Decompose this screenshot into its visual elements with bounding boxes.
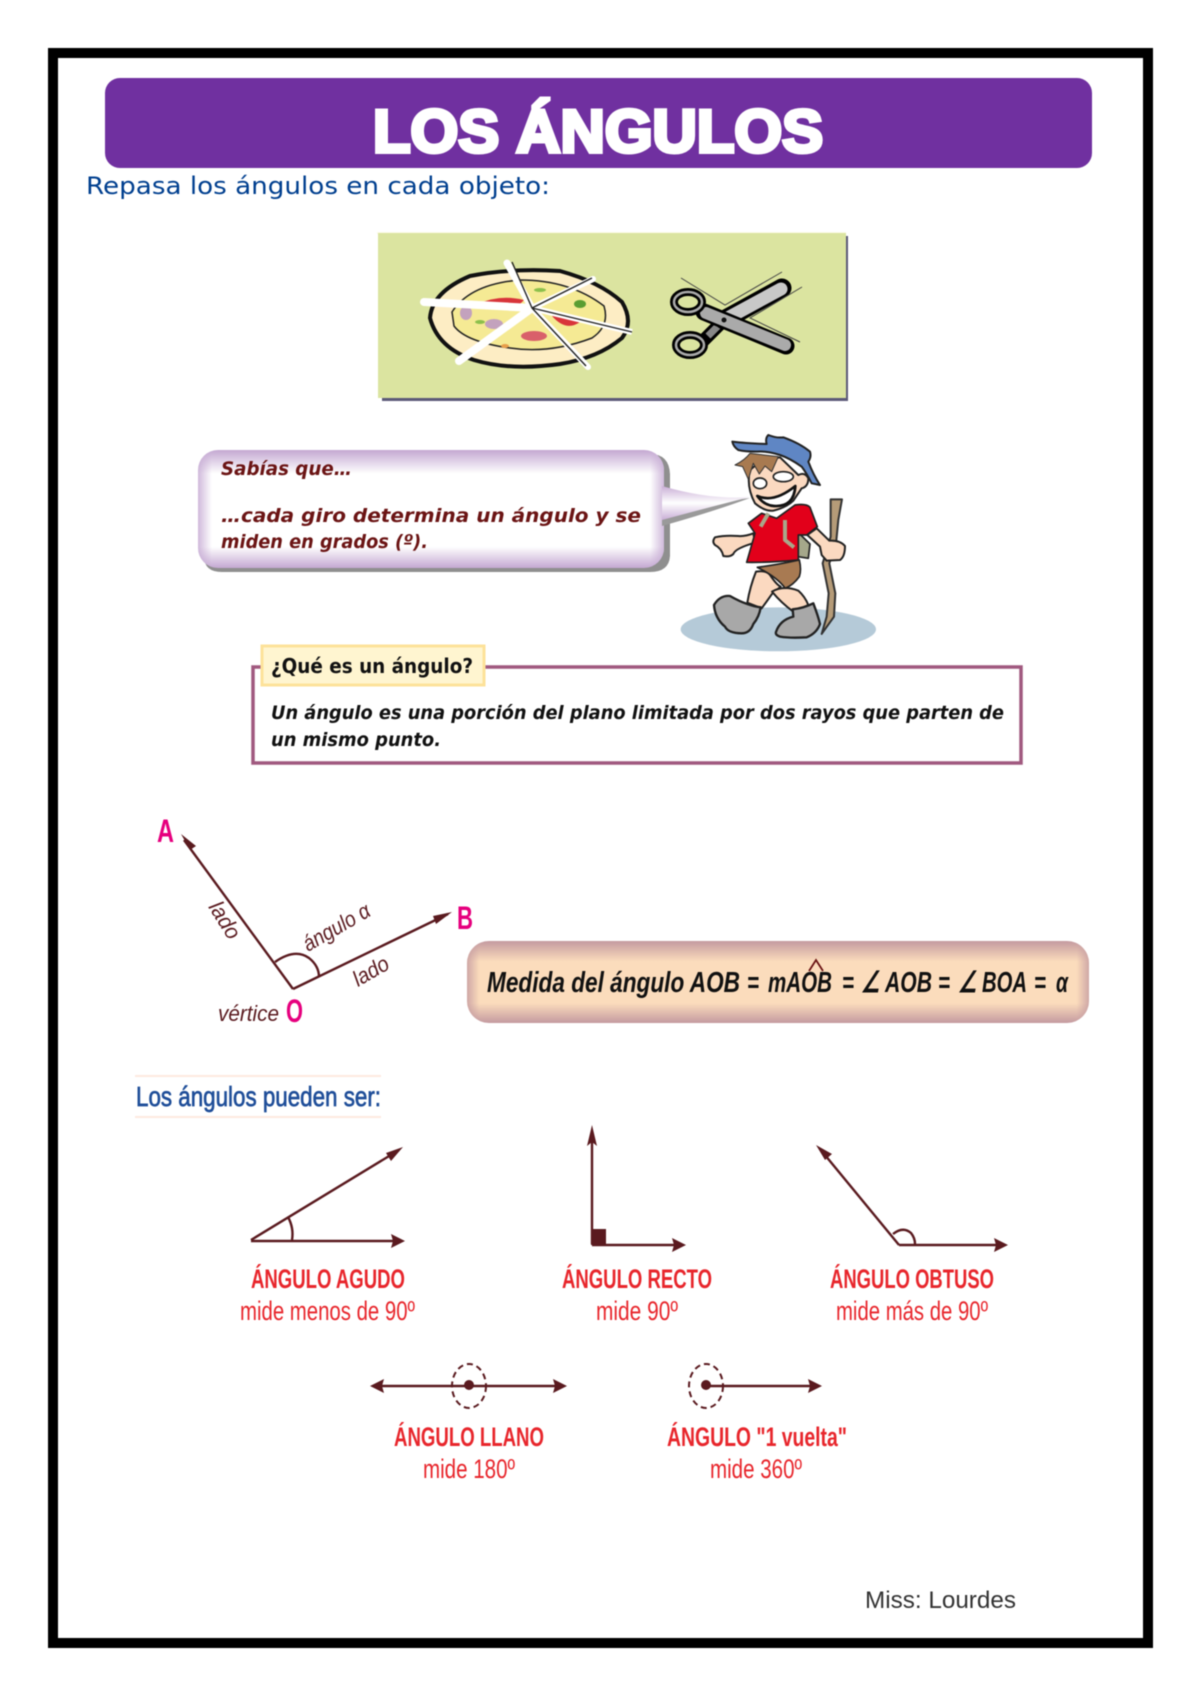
left boot (714, 596, 761, 633)
acute angle: ÁNGULO AGUDO (251, 1263, 405, 1294)
straight angle: ÁNGULO LLANO (394, 1421, 544, 1452)
hat (732, 435, 820, 485)
acute angle (240, 1147, 415, 1326)
diagram: parts of an angle: lado (204, 896, 246, 944)
formula pill: Medida del ángulo AOB (487, 967, 740, 999)
right arm (807, 528, 845, 561)
face (749, 457, 808, 511)
ray OB (293, 914, 448, 989)
formula pill: α (1056, 967, 1069, 999)
callout text: miden en grados (º). (221, 531, 428, 553)
ray OA (184, 840, 293, 989)
callout text: …cada giro determina un ángulo y se (221, 505, 641, 527)
formula pill: = (747, 967, 759, 999)
diagram: parts of an angle: O (286, 993, 303, 1029)
definition text: un mismo punto. (271, 729, 441, 751)
callout: did you know (198, 450, 750, 572)
eyes (753, 478, 767, 489)
formula pill: ∠ (861, 967, 880, 999)
right angle: mide 90º (596, 1296, 678, 1326)
shorts (757, 560, 800, 588)
right angle (562, 1125, 712, 1326)
title banner: LOS ÁNGULOS (373, 98, 823, 165)
full turn angle: mide 360º (710, 1454, 802, 1484)
walking stick (822, 499, 842, 634)
obtuse angle (816, 1145, 1008, 1326)
formula pill: BOA (982, 967, 1027, 999)
formula pill: AOB (884, 967, 932, 999)
formula pill: = (1034, 967, 1046, 999)
obtuse angle: mide más de 90º (836, 1296, 988, 1326)
diagram: parts of an angle: lado (348, 951, 393, 991)
instruction text: Repasa los ángulos en cada objeto: (86, 172, 550, 200)
formula pill: = (938, 967, 950, 999)
formula pill: ∠ (958, 967, 977, 999)
diagram: parts of an angle: ángulo α (298, 897, 376, 956)
heading label (262, 646, 484, 685)
diagram: parts of an angle (157, 813, 473, 1029)
title banner (105, 78, 1092, 168)
definition text: Un ángulo es una porción del plano limitada por dos rayos que parten de (271, 702, 1004, 724)
obtuse angle: ÁNGULO OBTUSO (830, 1263, 994, 1294)
full turn angle (667, 1364, 847, 1484)
icon: scissors (674, 272, 802, 355)
formula pill: mAOB (768, 967, 832, 999)
formula pill (467, 941, 1089, 1023)
acute angle: mide menos de 90º (240, 1296, 415, 1326)
diagram: parts of an angle: A (157, 813, 174, 849)
heading: types of angle: Los ángulos pueden ser: (136, 1081, 381, 1112)
diagram: parts of an angle: vértice (218, 1001, 279, 1026)
straps (761, 513, 794, 547)
full turn angle: ÁNGULO "1 vuelta" (667, 1421, 847, 1452)
panel: objects (377, 232, 848, 401)
hair (735, 453, 778, 479)
straight angle (370, 1364, 567, 1484)
author signature: Miss: Lourdes (865, 1587, 1016, 1614)
hat over O (809, 960, 823, 971)
callout text (221, 458, 641, 553)
angle arc (275, 954, 319, 977)
right angle: ÁNGULO RECTO (562, 1263, 712, 1294)
legs (747, 571, 781, 608)
left arm (713, 533, 755, 556)
smile (757, 486, 795, 506)
formula pill: = (842, 967, 854, 999)
diagram: parts of an angle: B (457, 900, 473, 936)
icon: hiker character (681, 435, 876, 651)
straight angle: mide 180º (423, 1454, 515, 1484)
icon: pizza (424, 262, 632, 367)
panel: what is an angle (253, 646, 1021, 763)
shirt (747, 505, 817, 562)
heading label: ¿Qué es un ángulo? (271, 654, 473, 678)
right boot (776, 603, 820, 638)
definition text (271, 702, 1004, 751)
speech bubble tail (662, 486, 750, 526)
callout text: Sabías que… (221, 458, 352, 480)
bag (795, 533, 810, 558)
